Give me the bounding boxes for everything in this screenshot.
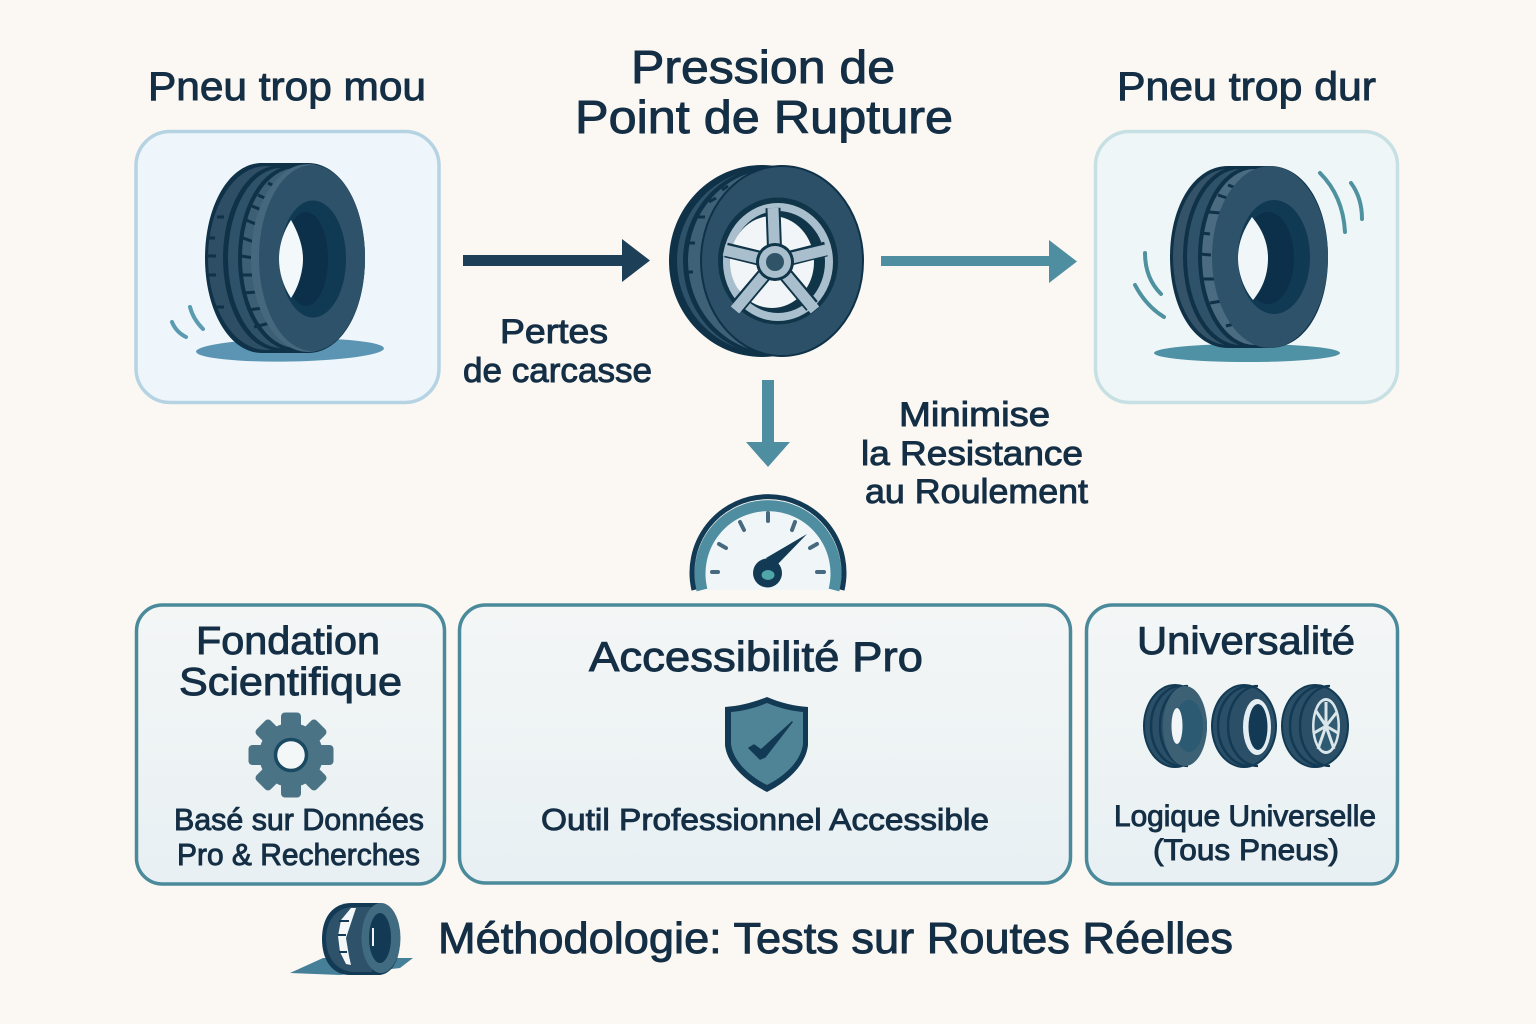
- label: Pertes de carcasse: de carcasse: [463, 352, 652, 390]
- panel text: Logique Universelle: Logique Universelle: [1114, 800, 1376, 833]
- main title: [575, 41, 953, 143]
- icon: tire c: [1281, 684, 1349, 768]
- arrow: center to hard tire: [881, 240, 1077, 283]
- icon: center wheel: [669, 165, 864, 357]
- panel heading: Fondation Scientifique: Scientifique: [179, 661, 402, 704]
- panel heading: Universalité: Universalité: [1137, 620, 1355, 663]
- panel: soft tire: [136, 132, 439, 402]
- panel heading: Accessibilité Pro: Accessibilité Pro: [589, 633, 923, 680]
- icon: hard tire: [1170, 166, 1328, 348]
- icon: gear: [248, 712, 334, 798]
- icon: three tires: [1143, 684, 1360, 768]
- icon: pressure gauge: [692, 497, 844, 590]
- heading: Pneu trop dur: Pneu trop dur: [1117, 65, 1376, 109]
- icon: hard tire motion lines: [1135, 173, 1362, 317]
- panel heading: Fondation Scientifique: Fondation: [196, 620, 380, 663]
- label: Pertes de carcasse: [463, 313, 652, 390]
- panel: hard tire: [1096, 132, 1398, 402]
- arrow: soft tire to center: [463, 239, 650, 282]
- arrow: center to gauge: [746, 380, 790, 467]
- icon: shield with check: [725, 697, 808, 792]
- icon: soft tire shadow: [196, 337, 384, 363]
- panel text: Basé sur Données: [174, 802, 424, 872]
- label: Minimise la Resistance au Roulement: Minimise: [899, 396, 1050, 434]
- icon: tire b: [1211, 684, 1277, 768]
- icon: methodology tire on road: [290, 903, 413, 975]
- panel heading: Fondation Scientifique: [179, 620, 402, 704]
- panel: Fondation Scientifique: [136, 605, 444, 884]
- icon: hard tire shadow: [1154, 344, 1340, 362]
- label: Minimise la Resistance au Roulement: au Roulement: [865, 473, 1089, 511]
- panel: Universalité: [1086, 605, 1398, 884]
- panel text: Basé sur Données: Basé sur Données: [174, 802, 424, 837]
- label: Minimise la Resistance au Roulement: [861, 396, 1089, 511]
- main title: Pression de: [631, 41, 895, 93]
- panel text: Logique Universelle: [1114, 800, 1376, 867]
- main title: Point de Rupture: [575, 91, 953, 143]
- label: Pertes de carcasse: Pertes: [500, 313, 608, 351]
- icon: soft tire motion lines: [172, 307, 203, 337]
- panel text: Logique Universelle: (Tous Pneus): [1153, 834, 1339, 867]
- panel text: Outil Professionnel Accessible: Outil Professionnel Accessible: [541, 802, 989, 837]
- label: Minimise la Resistance au Roulement: la Resistance: [861, 435, 1083, 473]
- icon: soft tire: [205, 163, 365, 353]
- panel: Accessibilité Pro: [460, 605, 1070, 883]
- heading: Pneu trop mou: Pneu trop mou: [148, 65, 426, 109]
- footer: methodology: Méthodologie: Tests sur Routes Réelles: [438, 914, 1233, 963]
- icon: tire a: [1143, 684, 1207, 768]
- panel text: Basé sur Données: Pro & Recherches: [177, 837, 420, 872]
